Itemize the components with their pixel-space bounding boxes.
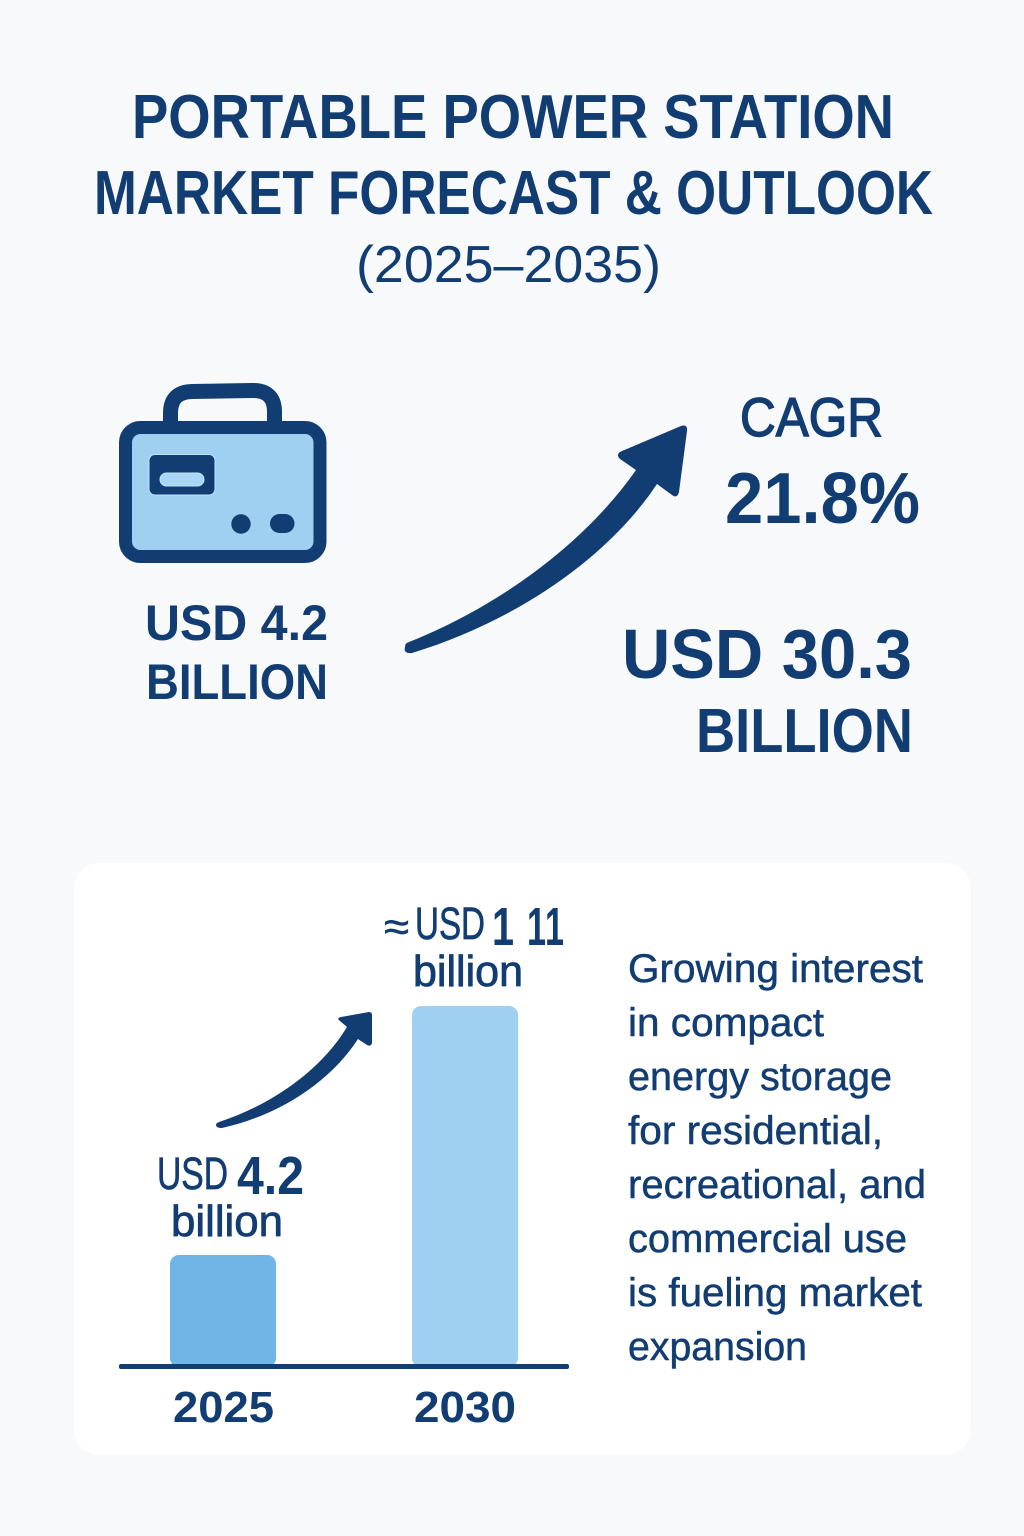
label: 2030 value: USD bbox=[415, 898, 485, 949]
title: PORTABLE POWER STATION bbox=[132, 83, 894, 152]
label: 2025 value: USD bbox=[157, 1148, 228, 1199]
label: 2025 value bbox=[157, 1146, 304, 1246]
label: 2030 value bbox=[384, 897, 564, 996]
bar: 2025 bbox=[170, 1255, 276, 1367]
CAGR bbox=[725, 386, 920, 539]
text: market summary: for residential, bbox=[628, 1109, 883, 1153]
arrow: main growth bbox=[405, 426, 687, 653]
forecast value bbox=[622, 615, 913, 766]
text: market summary bbox=[628, 947, 926, 1369]
forecast value: USD 30.3 bbox=[622, 615, 912, 693]
text: market summary: in compact bbox=[628, 1001, 824, 1045]
text: market summary: Growing interest bbox=[628, 947, 923, 991]
CAGR: CAGR bbox=[740, 386, 883, 448]
arrow: chart growth bbox=[216, 1012, 372, 1128]
start value: BILLION bbox=[146, 654, 328, 710]
text: market summary: commercial use bbox=[628, 1217, 907, 1261]
text: market summary: is fueling market bbox=[628, 1271, 922, 1315]
forecast value: BILLION bbox=[696, 697, 913, 766]
label: 2030 value: 1 bbox=[492, 897, 514, 957]
bar: 2030 bbox=[412, 1006, 518, 1367]
label: 2030 value: ≈ bbox=[384, 903, 409, 950]
label: 2025 axis: 2025 bbox=[173, 1383, 274, 1432]
title bbox=[94, 83, 933, 294]
text: market summary: recreational, and bbox=[628, 1163, 926, 1207]
label: 2025 value: billion bbox=[171, 1197, 283, 1246]
icon: portable power station bbox=[126, 390, 320, 556]
text: market summary: energy storage bbox=[628, 1055, 892, 1099]
label: 2025 value: 4.2 bbox=[237, 1146, 304, 1206]
baseline axis bbox=[119, 1364, 569, 1369]
title: (2025–2035) bbox=[356, 236, 661, 294]
label: 2030 axis: 2030 bbox=[414, 1383, 516, 1432]
label: 2030 value: billion bbox=[413, 947, 523, 996]
label: 2030 value: 1 bbox=[545, 897, 564, 957]
panel: bar chart and summary bbox=[74, 863, 971, 1455]
label: 2030 value: 1 bbox=[527, 897, 546, 957]
text: market summary: expansion bbox=[628, 1325, 807, 1369]
CAGR: 21.8% bbox=[725, 459, 920, 539]
bar chart bbox=[119, 897, 569, 1432]
start value bbox=[145, 595, 328, 710]
start value: USD 4.2 bbox=[145, 595, 328, 651]
